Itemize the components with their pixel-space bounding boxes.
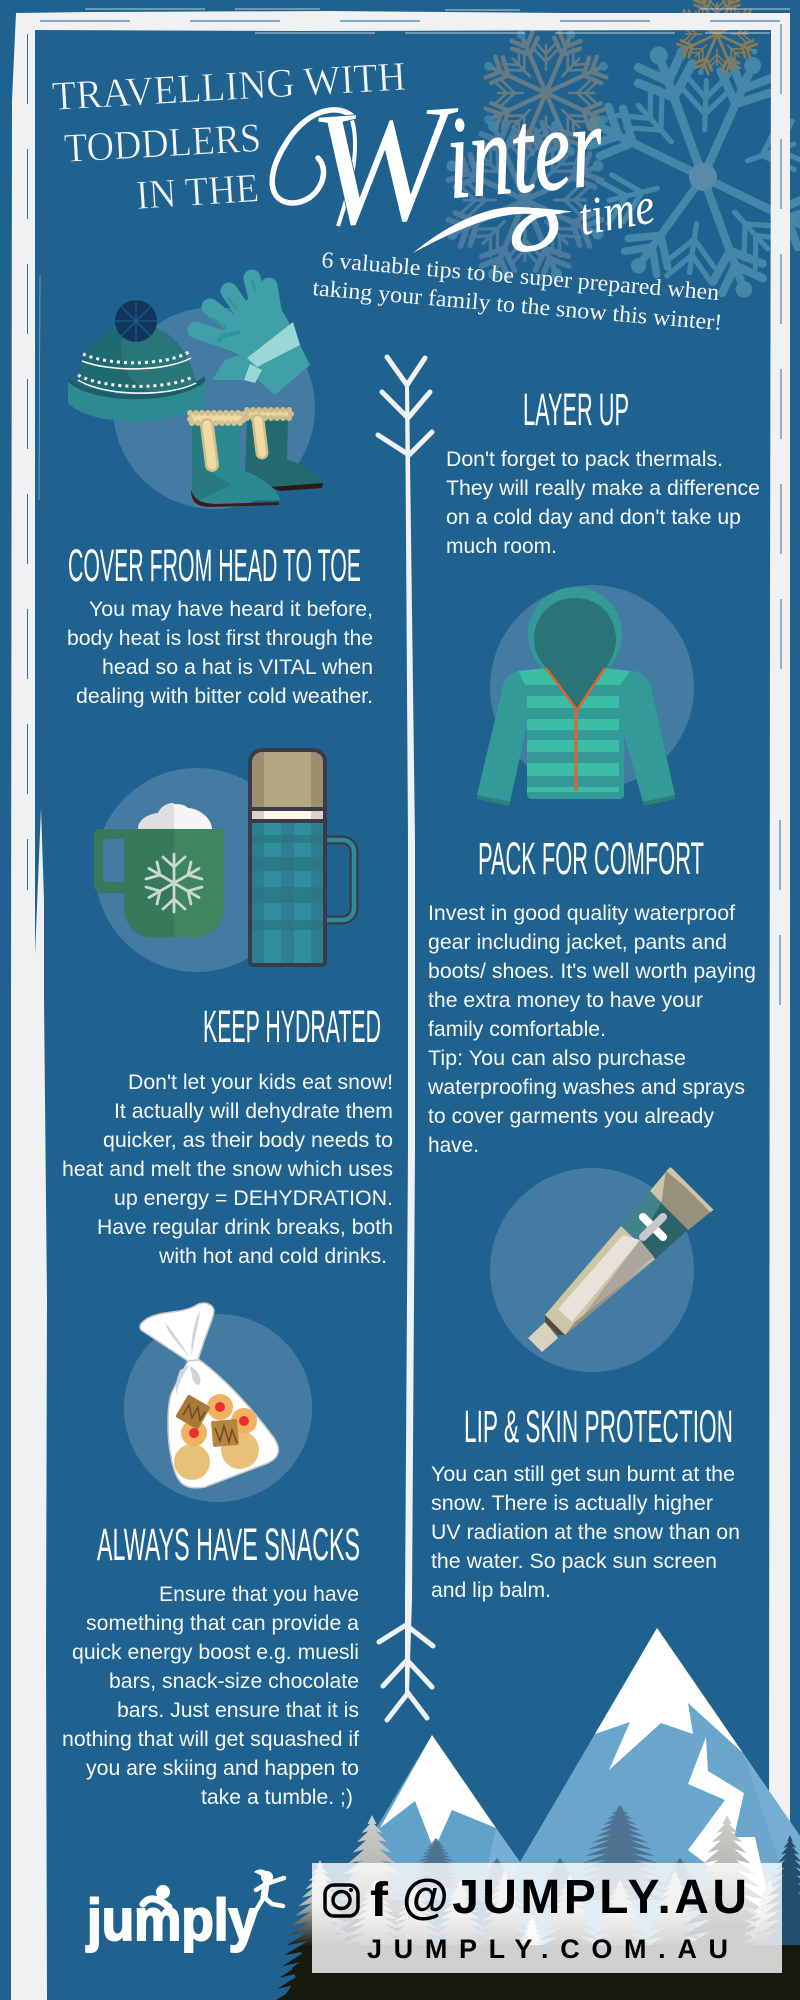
icon: beanie hat xyxy=(68,300,205,421)
circle xyxy=(113,307,315,509)
text block: the water. So pack sun screen xyxy=(431,1549,717,1573)
social handle: @JUMPLY.AU xyxy=(402,1871,747,1924)
mountain: small xyxy=(340,1735,560,1900)
text block xyxy=(427,901,756,1157)
website: JUMPLY.COM.AU xyxy=(367,1934,728,1964)
text block: quick energy boost e.g. muesli xyxy=(72,1640,359,1664)
title script: Winter time xyxy=(272,69,659,262)
text block: Ensure that you have xyxy=(159,1582,359,1606)
trees: on the mountains xyxy=(408,1805,707,1908)
circle xyxy=(124,1314,312,1502)
icon: jacket xyxy=(477,587,675,806)
text block xyxy=(67,597,373,708)
title: IN THE xyxy=(135,164,260,218)
arrow: centre timeline xyxy=(378,357,433,1720)
text block: much room. xyxy=(446,534,557,558)
text block: nothing that will get squashed if xyxy=(62,1727,359,1751)
text block: you are skiing and happen to xyxy=(86,1756,359,1780)
text block: You can still get sun burnt at the xyxy=(431,1462,735,1486)
title script: Winter time: W xyxy=(304,69,469,262)
mountain: large xyxy=(480,1628,800,1960)
title: TODDLERS xyxy=(63,114,262,171)
snowflake: blue grey xyxy=(439,114,611,286)
text block: up energy = DEHYDRATION. xyxy=(114,1186,393,1210)
text block: They will really make a difference xyxy=(446,476,760,500)
dark ground xyxy=(282,1945,800,2000)
panel: lip and skin protection xyxy=(431,1167,740,1602)
text block: bars. Just ensure that it is xyxy=(117,1698,359,1722)
text block: have. xyxy=(428,1133,479,1157)
text: COVER FROM HEAD TO TOE xyxy=(68,540,361,591)
text block: UV radiation at the snow than on xyxy=(431,1520,740,1544)
title script: Winter time: inter xyxy=(441,80,608,224)
icon: gloves xyxy=(196,278,310,395)
panel: layer up xyxy=(446,384,760,806)
text block: Have regular drink breaks, both xyxy=(97,1215,393,1239)
subtitle: 6 valuable tips to be super prepared when xyxy=(321,247,721,305)
trees: snow capped xyxy=(276,1815,800,2000)
text block: body heat is lost first through the xyxy=(67,626,373,650)
text block xyxy=(62,1070,393,1268)
icon: cream tube xyxy=(528,1167,713,1352)
icon: facebook f: f xyxy=(370,1874,389,1927)
text block: and lip balm. xyxy=(431,1578,551,1602)
text block: dealing with bitter cold weather. xyxy=(76,684,373,708)
text block: take a tumble. ;) xyxy=(201,1785,353,1809)
text block: Invest in good quality waterproof xyxy=(428,901,735,925)
heading: ALWAYS HAVE SNACKS xyxy=(97,1519,360,1570)
text block: bars, snack-size chocolate xyxy=(109,1669,359,1693)
logo: jumply: jumply xyxy=(86,1888,258,1953)
mountains and trees xyxy=(276,1628,800,2000)
text block: heat and melt the snow which uses xyxy=(62,1157,393,1181)
subtitle xyxy=(312,247,723,335)
text block: Don't forget to pack thermals. xyxy=(446,447,723,471)
text block: boots/ shoes. It's well worth paying xyxy=(428,959,756,983)
text block: quicker, as their body needs to xyxy=(103,1128,393,1152)
snowflake: large teal xyxy=(576,37,800,306)
text block: head so a hat is VITAL when xyxy=(102,655,373,679)
text block: family comfortable. xyxy=(428,1017,606,1041)
panel: layer up: LAYER UP xyxy=(523,384,629,435)
text block: something that can provide a xyxy=(86,1611,359,1635)
icon: crawling baby xyxy=(143,1885,170,1907)
title: TRAVELLING WITH xyxy=(51,53,407,119)
snowflake: grey xyxy=(479,25,613,161)
icon: boots xyxy=(190,410,323,507)
text block: gear including jacket, pants and xyxy=(428,930,727,954)
circle xyxy=(490,585,694,789)
panel: keep hydrated: KEEP HYDRATED xyxy=(203,1001,381,1052)
title script: Winter time: time xyxy=(574,177,659,247)
icon: thermos xyxy=(250,750,354,965)
tree: dark navy xyxy=(756,1835,800,1965)
text block: waterproofing washes and sprays xyxy=(427,1075,745,1099)
subtitle: taking your family to the snow this winter! xyxy=(312,275,723,335)
icon: mug xyxy=(94,803,224,938)
text block: snow. There is actually higher xyxy=(431,1491,713,1515)
panel: social handle box xyxy=(312,1863,782,1973)
text block: the extra money to have your xyxy=(428,988,703,1012)
icon: running girl xyxy=(254,1869,284,1912)
panel: always have snacks xyxy=(62,1303,360,1809)
text block xyxy=(431,1462,740,1602)
text block xyxy=(446,447,760,558)
icon: instagram xyxy=(325,1885,358,1916)
text block: Tip: You can also purchase xyxy=(428,1046,686,1070)
text block: on a cold day and don't take up xyxy=(446,505,741,529)
panel: keep hydrated xyxy=(62,750,393,1268)
panel: pack for comfort xyxy=(427,833,756,1157)
box xyxy=(312,1863,782,1973)
circle xyxy=(95,768,299,972)
icon: snack bag xyxy=(140,1303,278,1488)
text block: Don't let your kids eat snow! xyxy=(128,1070,393,1094)
text block: with hot and cold drinks. xyxy=(158,1244,387,1268)
text block xyxy=(62,1582,359,1809)
text block: It actually will dehydrate them xyxy=(114,1099,393,1123)
text block: You may have heard it before, xyxy=(89,597,373,621)
title xyxy=(51,53,407,218)
panel: cover from head to toe xyxy=(67,278,373,708)
snowflake: brown xyxy=(673,0,761,78)
circle xyxy=(490,1168,694,1372)
tree: white highlight xyxy=(509,1915,555,2000)
text block: to cover garments you already xyxy=(428,1104,714,1128)
